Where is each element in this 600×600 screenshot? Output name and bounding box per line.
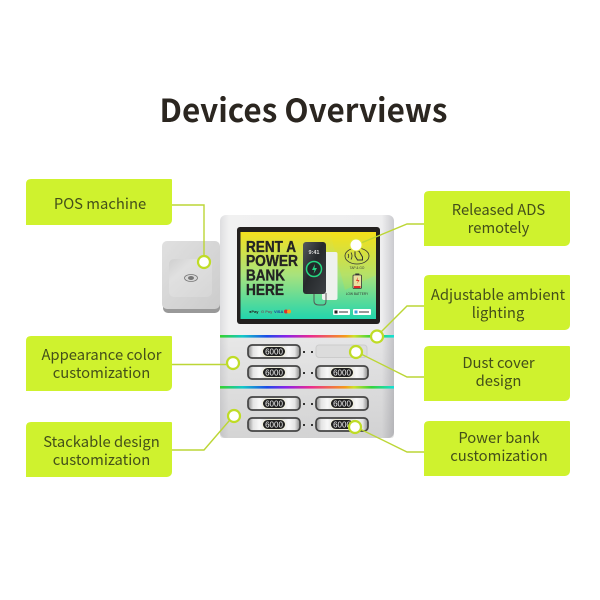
power bank slots: 6000 xyxy=(265,420,283,430)
power bank slots: 6000 xyxy=(265,368,283,378)
app store badges xyxy=(333,309,371,315)
low battery icon xyxy=(346,274,369,296)
screen headline xyxy=(246,239,298,299)
callout: POS machine xyxy=(26,179,210,268)
power bank slots: 6000 xyxy=(265,400,283,408)
slot indicator dots xyxy=(303,351,313,426)
callout: Stackable design customization xyxy=(26,410,240,477)
device body xyxy=(220,215,394,438)
low battery icon: LOW BATTERY xyxy=(346,292,369,296)
callout: Released ADS remotely: remotely xyxy=(468,217,530,238)
callout: Dust cover design: design xyxy=(476,370,521,391)
callout: Released ADS remotely: Released ADS xyxy=(452,199,545,220)
dust cover xyxy=(316,345,367,358)
callout: Power bank customization: Power bank xyxy=(458,427,541,448)
tap and go icon: TAP & GO xyxy=(350,266,365,270)
ambient light strip bottom xyxy=(220,386,394,389)
ambient light strip top xyxy=(220,335,394,338)
power bank slots: 6000 xyxy=(333,368,351,378)
payment logos: ●Pay xyxy=(249,309,259,314)
tap and go icon xyxy=(345,248,369,270)
callout: Appearance color customization: Appearance color xyxy=(41,344,162,365)
callout: Power bank customization: customization xyxy=(450,445,548,466)
callout: Dust cover design xyxy=(350,346,570,401)
power bank slots: 6000 xyxy=(333,420,351,430)
phone and power bank: 9:41 xyxy=(308,250,320,256)
power bank slots xyxy=(248,345,368,431)
callout: Adjustable ambient lighting: lighting xyxy=(472,302,525,323)
callout: Adjustable ambient lighting: Adjustable ambient xyxy=(431,284,566,305)
callout: POS machine: POS machine xyxy=(54,193,146,214)
callout: Stackable design customization: Stackable design xyxy=(43,431,160,452)
title: Devices Overviews xyxy=(160,86,448,132)
callout: Appearance color customization: customization xyxy=(53,362,150,383)
callout: Power bank customization xyxy=(349,421,570,476)
payment logos xyxy=(249,309,291,314)
screen xyxy=(237,227,380,324)
screen headline: POWER xyxy=(246,253,298,270)
phone and power bank xyxy=(303,242,338,305)
screen headline: HERE xyxy=(246,282,284,299)
payment logos: VISA xyxy=(274,309,283,314)
icon: POS machine xyxy=(162,241,220,313)
power bank slots: 6000 xyxy=(333,400,351,408)
callout: Dust cover design: Dust cover xyxy=(462,352,535,373)
device: charging station xyxy=(220,215,394,438)
callout: Appearance color customization xyxy=(26,336,239,391)
screen headline: RENT A xyxy=(246,239,296,256)
payment logos: G Pay xyxy=(261,309,273,314)
callout: Adjustable ambient lighting xyxy=(371,275,570,342)
screen headline: BANK xyxy=(246,268,286,284)
power bank slots: 6000 xyxy=(265,348,283,356)
callout: Released ADS remotely xyxy=(350,191,570,251)
callout: Stackable design customization: customization xyxy=(53,449,150,470)
